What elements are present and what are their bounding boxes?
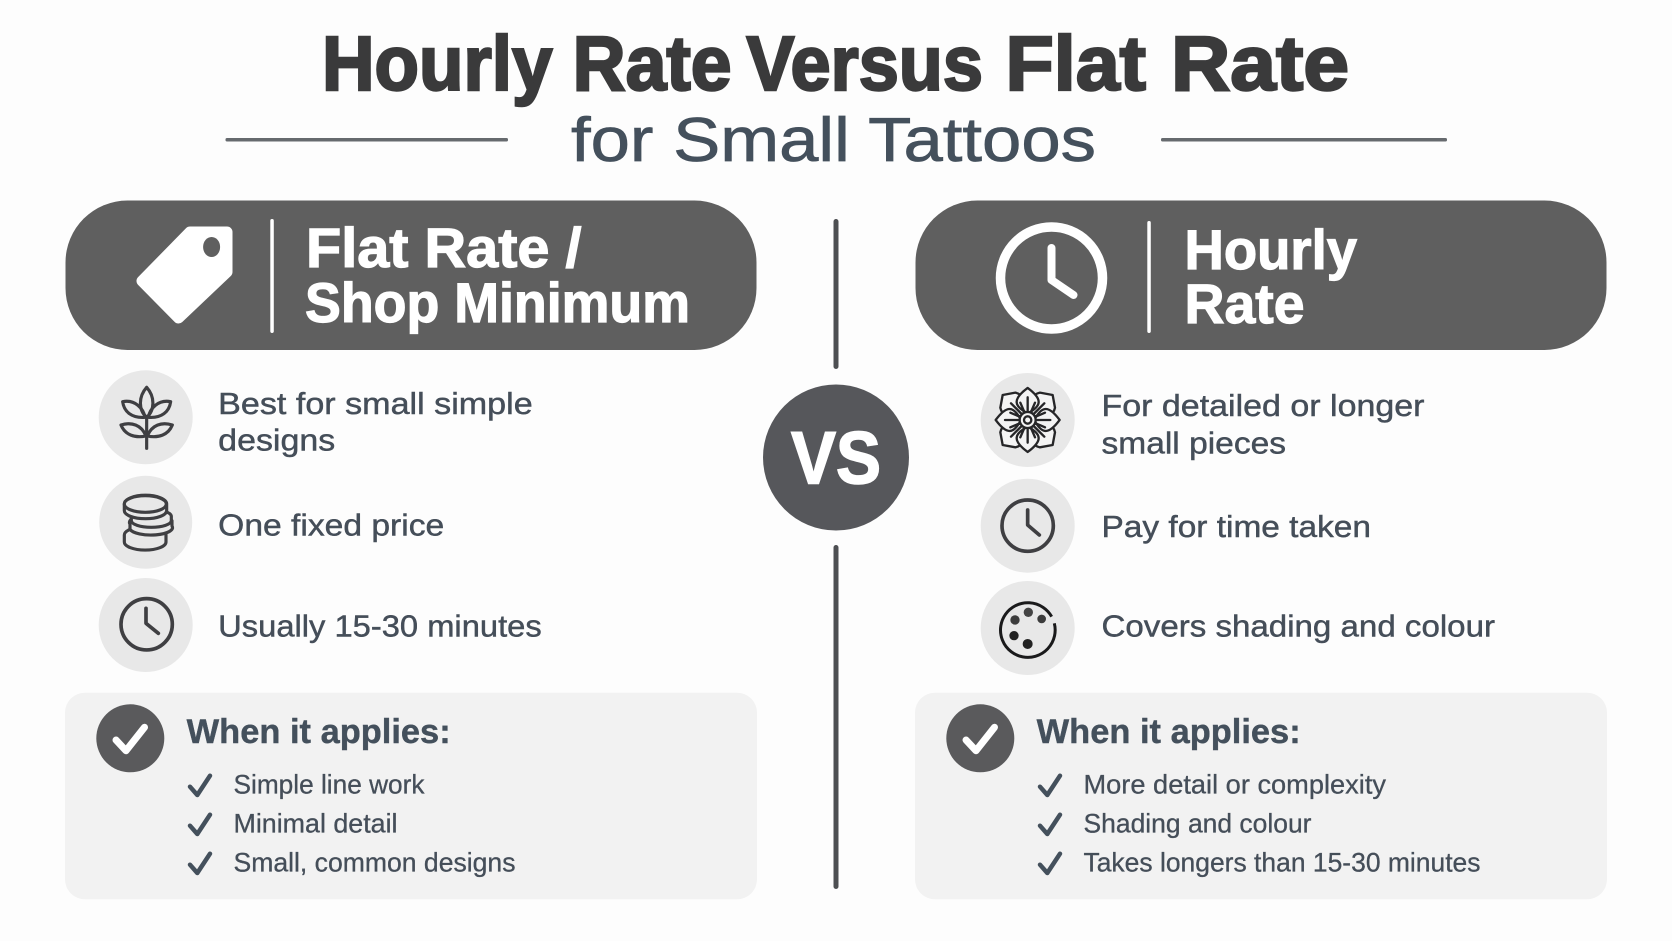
icon: clock xyxy=(1000,227,1102,329)
icon: price tag xyxy=(142,232,227,318)
feature: detailed pieces xyxy=(981,373,1424,467)
banner text: Hourly xyxy=(1184,218,1357,281)
panel: hourly rate banner xyxy=(916,200,1606,350)
feature: detailed pieces: small pieces xyxy=(1102,426,1286,461)
feature: detailed pieces: For detailed or longer xyxy=(1102,388,1424,423)
feature: shading and colour: Covers shading and colour xyxy=(1102,608,1495,644)
icon: palette xyxy=(1001,603,1055,657)
heading: When it applies: xyxy=(187,713,451,751)
panel: hourly rate features xyxy=(981,373,1495,675)
subtitle xyxy=(226,106,1447,175)
feature: one fixed price: One fixed price xyxy=(218,507,444,542)
icon: clock xyxy=(121,599,172,650)
icon: check badge xyxy=(946,704,1014,772)
feature: pay for time taken xyxy=(981,479,1371,573)
icon: coin stack xyxy=(124,495,173,550)
banner text xyxy=(305,216,690,334)
feature: small simple designs: designs xyxy=(218,422,335,458)
icon: clock xyxy=(1002,500,1053,551)
feature: one fixed price xyxy=(99,476,444,569)
title: Flat xyxy=(1006,21,1146,107)
panel: hourly rate, when it applies xyxy=(915,693,1607,899)
panel: flat rate features xyxy=(99,370,542,672)
icon: flower xyxy=(994,386,1061,454)
feature: usually 15-30 minutes: Usually 15-30 minutes xyxy=(218,609,542,644)
feature: small simple designs xyxy=(99,370,533,464)
title: Hourly xyxy=(322,21,553,107)
feature: small simple designs: Best for small simple xyxy=(218,386,533,421)
feature: pay for time taken: Pay for time taken xyxy=(1102,509,1371,544)
feature: shading and colour xyxy=(981,581,1495,675)
checklist: Small, common designs xyxy=(234,848,516,878)
center divider with VS badge xyxy=(763,219,909,889)
panel: flat rate banner xyxy=(66,200,756,350)
banner text xyxy=(1184,218,1357,335)
banner text: Flat Rate / xyxy=(306,216,582,279)
title: Rate xyxy=(573,21,732,107)
checklist: Simple line work xyxy=(234,769,425,799)
checklist xyxy=(190,769,516,878)
title: Versus xyxy=(746,21,983,107)
title: Rate xyxy=(1171,21,1349,107)
heading: When it applies: xyxy=(1037,713,1301,751)
checklist: Minimal detail xyxy=(234,808,398,838)
checklist: Shading and colour xyxy=(1084,808,1312,838)
checklist: More detail or complexity xyxy=(1084,769,1386,799)
title xyxy=(322,21,1349,107)
banner text: Rate xyxy=(1184,272,1304,335)
feature: usually 15-30 minutes xyxy=(99,578,542,672)
checklist xyxy=(1040,769,1480,878)
center divider with VS badge: VS xyxy=(791,416,881,500)
icon: leaf sprig xyxy=(121,387,172,448)
panel: flat rate, when it applies xyxy=(65,693,757,899)
icon: check badge xyxy=(96,704,164,772)
banner text: Shop Minimum xyxy=(305,271,690,334)
checklist: Takes longers than 15-30 minutes xyxy=(1084,848,1480,878)
subtitle: for Small Tattoos xyxy=(571,106,1096,175)
